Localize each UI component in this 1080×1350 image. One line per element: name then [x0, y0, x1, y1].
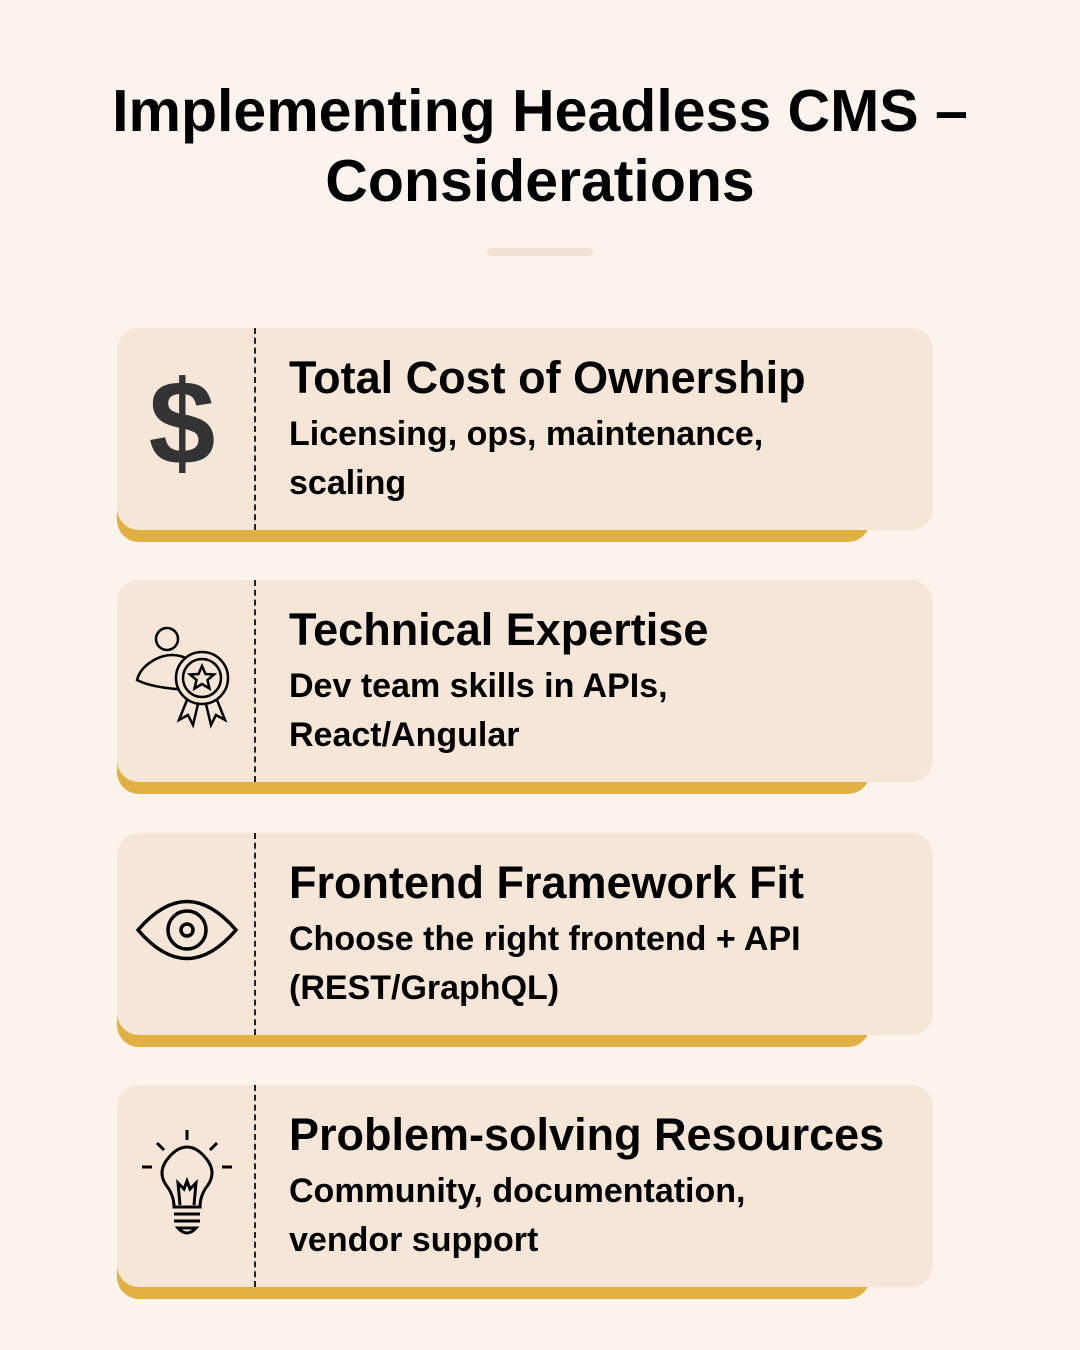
text: technical expertise	[289, 604, 708, 754]
panel: problem-solving	[117, 1085, 933, 1299]
text: technical expertise: Technical Expertise	[289, 604, 708, 655]
title	[112, 78, 968, 214]
title: Considerations	[325, 148, 755, 214]
text: technical expertise: Dev team skills in APIs,	[289, 667, 668, 705]
text: total cost: scaling	[289, 464, 406, 502]
text: frontend framework	[289, 857, 804, 1007]
text: total cost: Total Cost of Ownership	[289, 352, 806, 403]
text: technical expertise: React/Angular	[289, 716, 520, 754]
text: problem-solving: vendor support	[289, 1221, 538, 1259]
icon: eye	[136, 900, 238, 960]
icon: person with award	[136, 626, 230, 728]
title: Implementing Headless CMS –	[112, 78, 968, 144]
icon: dollar: $	[149, 356, 215, 490]
text: problem-solving: Problem-solving Resources	[289, 1109, 884, 1160]
text: total cost: Licensing, ops, maintenance,	[289, 415, 763, 453]
text: problem-solving: Community, documentation,	[289, 1172, 745, 1210]
text: frontend framework: Choose the right frontend + API	[289, 920, 801, 958]
icon: lightbulb	[142, 1130, 232, 1234]
panel: frontend framework	[117, 833, 933, 1047]
text: total cost	[289, 352, 806, 502]
text: frontend framework: Frontend Framework Fit	[289, 857, 804, 908]
panel: total cost	[117, 328, 933, 542]
text: frontend framework: (REST/GraphQL)	[289, 969, 559, 1007]
text: problem-solving	[289, 1109, 884, 1259]
panel: technical expertise	[117, 580, 933, 794]
